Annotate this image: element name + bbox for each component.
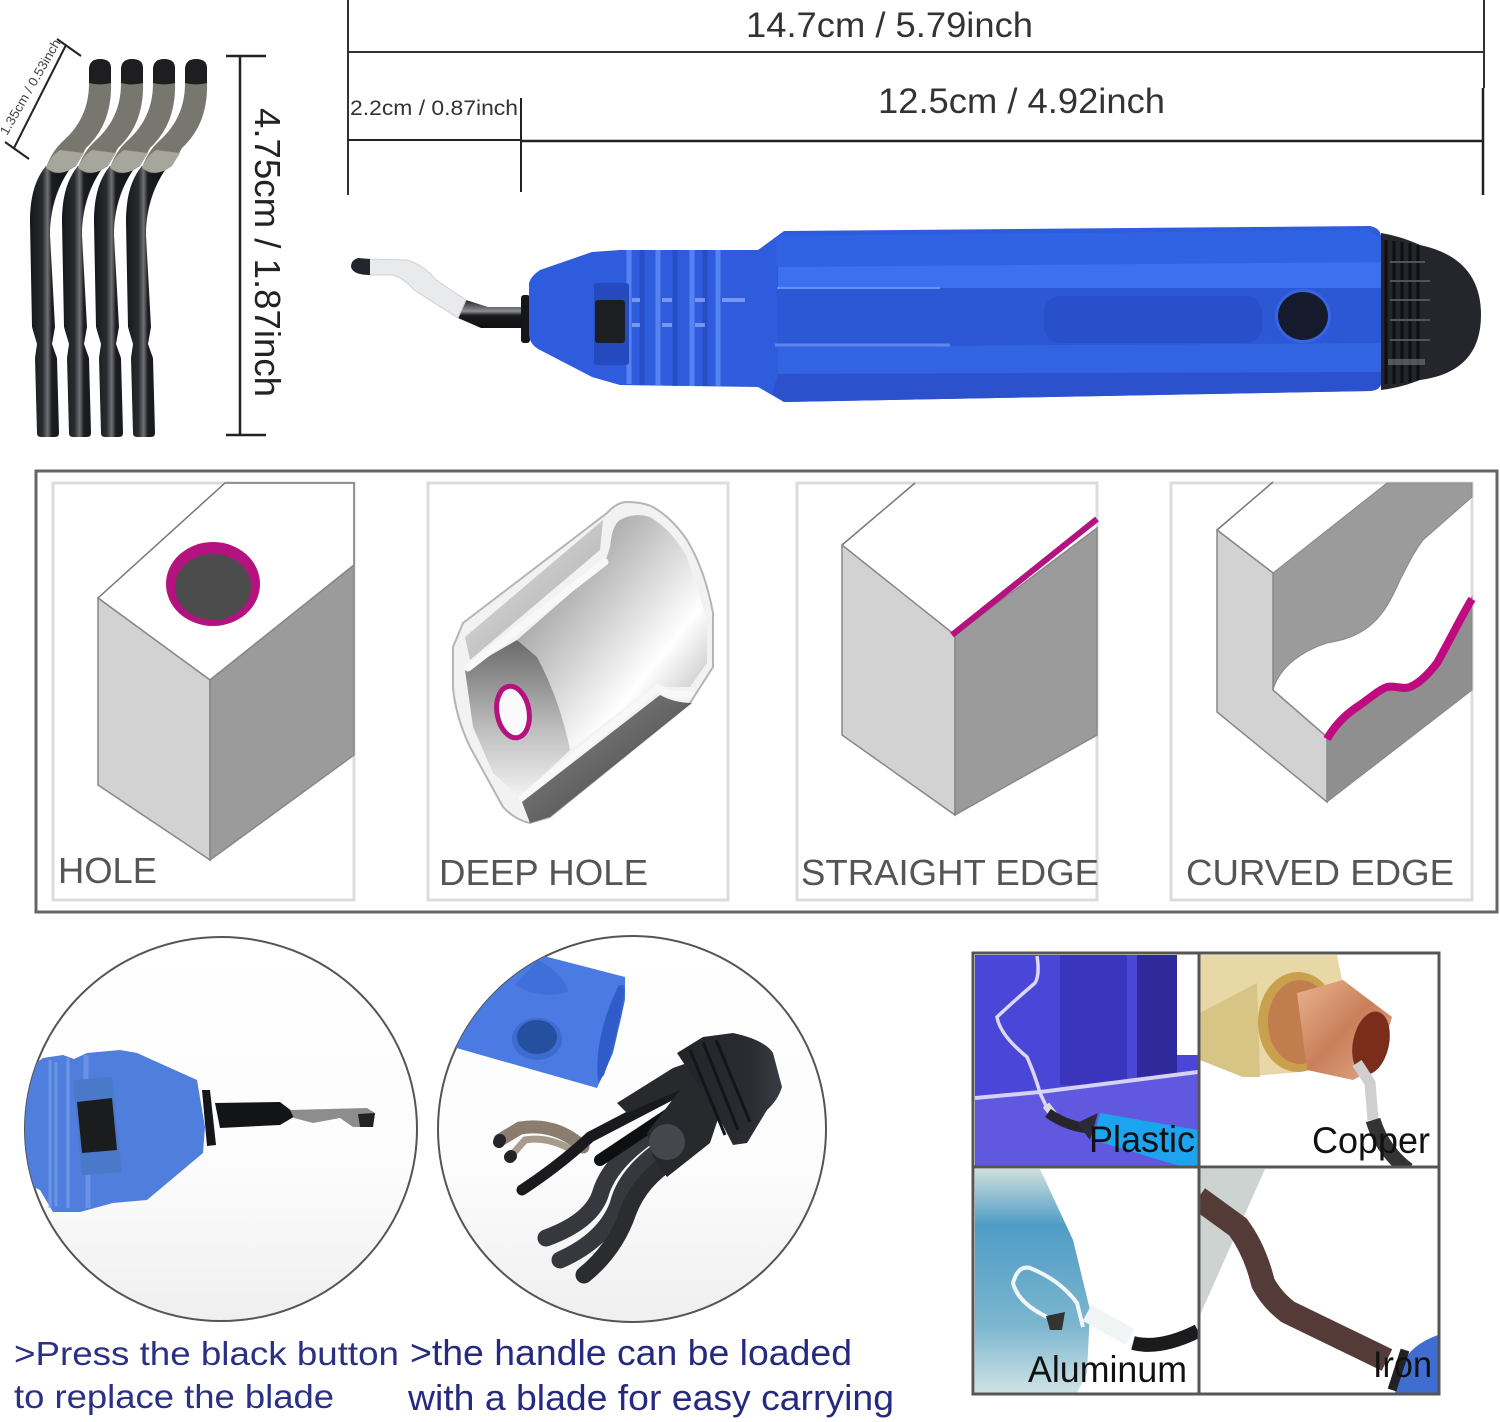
- total length dimension: 14.7cm / 5.79inch: [746, 6, 1033, 45]
- collar: [202, 1090, 216, 1146]
- tube end wall: [465, 640, 570, 797]
- tool grip recess: [1044, 296, 1262, 343]
- tool side button: [1275, 289, 1331, 343]
- tool blade: [351, 258, 530, 343]
- button: [77, 1098, 117, 1153]
- tube interior: [517, 515, 707, 750]
- blades bundle: [522, 1085, 690, 1275]
- card: deep hole: DEEP HOLE: [439, 852, 648, 893]
- circle photo: blade storage: [430, 936, 826, 1322]
- blade extension dimension: [348, 97, 521, 192]
- material tile: copper: Copper: [1312, 1120, 1430, 1161]
- shaft: [215, 1102, 297, 1128]
- tool handle: [529, 226, 1381, 402]
- materials grid: [973, 953, 1439, 1394]
- material tile: aluminum: [975, 1169, 1198, 1393]
- card: straight edge: STRAIGHT EDGE: [801, 852, 1099, 893]
- open handle: [456, 956, 625, 1088]
- blade extension dimension: 2.2cm / 0.87inch: [350, 97, 518, 120]
- caption: blade storage: with a blade for easy carrying: [407, 1377, 894, 1418]
- tan blade: [499, 1127, 583, 1157]
- card: hole: [53, 483, 354, 900]
- material tile: iron: [1198, 1169, 1438, 1393]
- material tile: aluminum: Aluminum: [1028, 1349, 1187, 1390]
- caption: press button: [14, 1335, 399, 1415]
- end cap: [677, 1033, 782, 1145]
- card: hole: HOLE: [58, 850, 157, 891]
- slot: [73, 1077, 122, 1175]
- tool end cap: [1381, 233, 1481, 390]
- nozzle: [20, 1050, 205, 1212]
- deburring tool: [351, 226, 1481, 402]
- card: curved edge: CURVED EDGE: [1186, 852, 1454, 893]
- material tile: plastic: [975, 955, 1198, 1166]
- button: [649, 1124, 685, 1160]
- blade length dimension: 4.75cm / 1.87inch: [247, 108, 288, 397]
- lower tube strip: [522, 695, 692, 823]
- card: straight edge: [797, 483, 1099, 900]
- handle length dimension: [521, 82, 1483, 195]
- card: curved edge: [1171, 482, 1472, 900]
- caption: press button: to replace the blade: [14, 1378, 334, 1415]
- circle photo: press button: [20, 937, 417, 1321]
- tube outer body: [453, 502, 713, 823]
- caption: blade storage: [407, 1332, 894, 1418]
- material tile: copper: [1200, 955, 1438, 1170]
- material tile: iron: Iron: [1373, 1344, 1432, 1385]
- caption: press button: >Press the black button: [14, 1335, 399, 1372]
- upper tube strip: [465, 520, 603, 660]
- caption: blade storage: >the handle can be loaded: [410, 1332, 852, 1373]
- tool nose ribs: [629, 250, 745, 386]
- blade holder body: [617, 1062, 720, 1177]
- blade length dimension: [226, 56, 288, 435]
- handle length dimension: 12.5cm / 4.92inch: [878, 82, 1165, 121]
- blade tip: [290, 1108, 375, 1127]
- tool handle facets: [772, 230, 1381, 402]
- blade width dimension: [0, 36, 81, 159]
- panel: deburring use cases: [36, 471, 1497, 912]
- replacement blades set: [30, 59, 207, 437]
- tool slider button: [594, 283, 629, 365]
- total length dimension: [348, 0, 1484, 195]
- card: deep hole: [428, 483, 728, 900]
- material tile: plastic: Plastic: [1089, 1119, 1195, 1160]
